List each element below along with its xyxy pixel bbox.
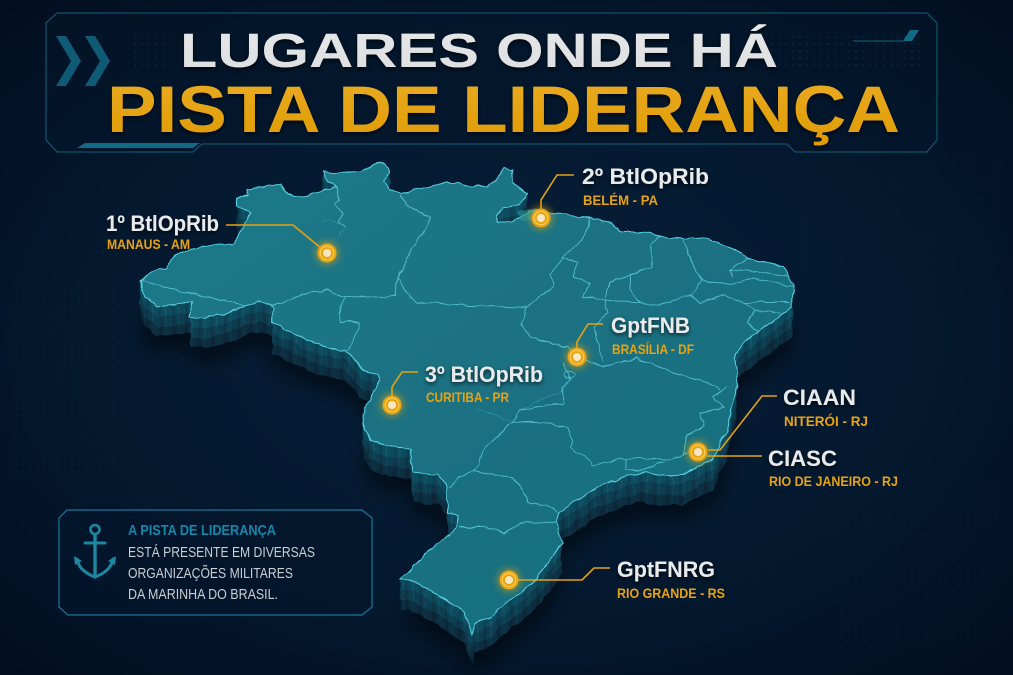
label: 2º BtlOpRib: 2º BtlOpRib [582,164,709,189]
label: 3º BtlOpRib [425,362,543,405]
label: 2º BtlOpRib [582,164,709,208]
panel: info box [59,510,372,615]
icon: anchor [74,525,116,577]
accent bar bottom-left [77,143,200,148]
info text [128,523,315,603]
map of Brazil [140,163,793,675]
pin: Curitiba [381,394,403,416]
info text: A PISTA DE LIDERANÇA [128,523,276,539]
leader lines [226,175,777,580]
state borders [140,187,792,533]
info text: DA MARINHA DO BRASIL. [128,587,278,603]
label: 1º BtlOpRib: 1º BtlOpRib [106,211,219,236]
label: 1º BtlOpRib [106,211,219,252]
pin: Manaus [316,242,338,264]
title line 2: PISTA DE LIDERANÇA [107,72,900,146]
info text: ORGANIZAÇÕES MILITARES [128,565,293,582]
label: CIAAN: NITERÓI - RJ [784,412,868,429]
pin: Belém [530,207,552,229]
header panel [46,13,937,152]
pin: Rio de Janeiro and Niterói [687,441,709,463]
label: CIAAN: CIAAN [783,385,856,410]
label: CIASC: RIO DE JANEIRO - RJ [769,473,898,489]
label: 2º BtlOpRib: BELÉM - PA [583,192,658,208]
label: 3º BtlOpRib: CURITIBA - PR [426,389,509,405]
label: CIASC [768,446,898,489]
label: CIAAN [783,385,868,429]
label: CIASC: CIASC [768,446,837,471]
label: GptFNRG [617,557,725,601]
accent mark top-right [853,30,919,41]
label: 3º BtlOpRib: 3º BtlOpRib [425,362,543,387]
label: GptFNB: BRASÍLIA - DF [612,341,694,357]
title line 1: LUGARES ONDE HÁ [180,24,778,78]
pin: Rio Grande [498,569,520,591]
info text: ESTÁ PRESENTE EM DIVERSAS [128,544,315,561]
label: GptFNRG: RIO GRANDE - RS [617,585,725,601]
label: GptFNRG: GptFNRG [617,557,715,582]
label: GptFNB: GptFNB [611,313,690,338]
label: 1º BtlOpRib: MANAUS - AM [107,236,190,252]
icon: header chevrons [56,36,110,86]
pin: Brasília [566,346,588,368]
label: GptFNB [611,313,694,357]
